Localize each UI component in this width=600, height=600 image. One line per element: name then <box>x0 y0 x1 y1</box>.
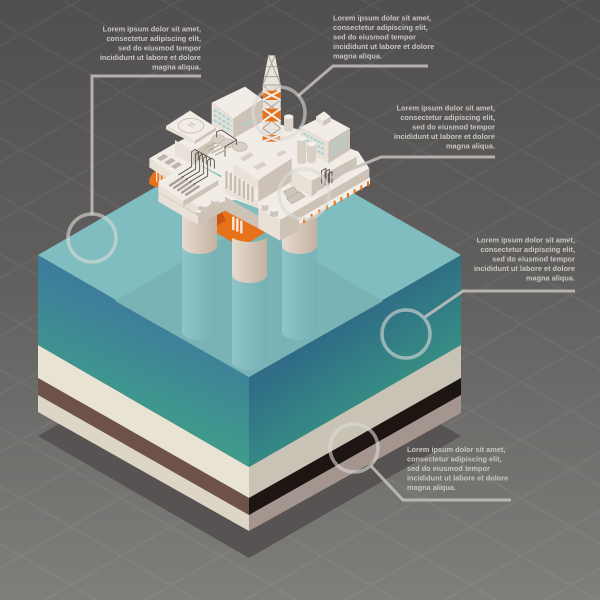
callout 3: deck <box>279 104 495 219</box>
water surface <box>38 133 461 377</box>
callout text 4: sed do eiusmod tempor <box>492 254 575 264</box>
callout text 3: consectetur adipiscing elit, <box>400 113 495 122</box>
submerged legs <box>182 225 317 370</box>
drilling derrick <box>263 55 281 142</box>
helideck <box>166 111 216 165</box>
central block <box>233 143 292 190</box>
orange understructure centre <box>199 207 266 247</box>
dark rock layer <box>38 378 461 515</box>
sand layer <box>38 345 461 498</box>
main building <box>212 87 263 138</box>
callout text 3: magna aliqua. <box>446 142 495 150</box>
callout text 1: incididunt ut labore et dolore <box>100 53 201 62</box>
callout text 5: incididunt ut labore et dolore <box>407 474 508 482</box>
callout text 2: Lorem ipsum dolor sit amet, <box>333 14 431 22</box>
callout text 4: consectetur adipiscing elit, <box>480 245 575 254</box>
walkway right <box>317 176 345 197</box>
callout text 2: magna aliqua. <box>333 52 382 60</box>
right building windows <box>303 133 325 155</box>
ground shadow <box>38 314 461 558</box>
horizontal tanks right <box>283 187 305 204</box>
callout text 4: magna aliqua. <box>526 274 575 282</box>
derrick orange bands <box>263 91 281 142</box>
callout text 3: incididunt ut labore et dolore <box>394 132 495 141</box>
callout 4: water <box>382 236 575 358</box>
callout text 1: magna aliqua. <box>152 62 201 72</box>
callout text 2: consectetur adipiscing elit, <box>333 23 428 32</box>
pipework left <box>178 149 214 184</box>
seabed block <box>38 345 461 531</box>
pipework centre <box>217 130 237 157</box>
callout text 1: sed do eiusmod tempor <box>118 44 201 52</box>
floor grating <box>205 143 226 155</box>
roof unit <box>316 111 331 126</box>
water left face <box>38 255 249 467</box>
right building <box>300 111 350 163</box>
grey cooling module <box>169 177 199 195</box>
water right face <box>249 255 461 467</box>
small deck tanks <box>196 198 278 217</box>
central and right lower deck <box>217 117 369 241</box>
orange understructure rear <box>149 171 167 187</box>
platform legs above water <box>182 205 317 283</box>
callout text 3: sed do eiusmod tempor <box>412 122 495 132</box>
callout text 5: sed do eiusmod tempor <box>407 464 490 473</box>
callout 1: surface <box>68 24 201 262</box>
callout text 1: Lorem ipsum dolor sit amet, <box>103 24 201 34</box>
callout text 4: incididunt ut labore et dolore <box>474 264 575 273</box>
vent stacks <box>225 171 254 203</box>
water block <box>38 133 461 467</box>
submerged back floor seen through surface <box>115 223 383 377</box>
grey ridged units left <box>157 154 182 169</box>
callout text 2: sed do eiusmod tempor <box>333 32 416 42</box>
central deck faces <box>225 170 292 208</box>
lower left deck <box>158 162 255 225</box>
vertical storage tanks <box>284 114 316 164</box>
main deck silhouette <box>149 113 358 207</box>
callout text 5: consectetur adipiscing elit, <box>407 454 502 464</box>
callout text 5: Lorem ipsum dolor sit amet, <box>407 445 505 454</box>
callout text 5: magna aliqua. <box>407 483 456 492</box>
pipework right <box>322 168 332 187</box>
callout 5: seabed <box>330 424 511 500</box>
callout 2: derrick <box>253 14 434 139</box>
horizontal tanks <box>212 135 247 151</box>
callout text 1: consectetur adipiscing elit, <box>106 34 201 43</box>
raised slab left <box>158 165 218 207</box>
callout text 3: Lorem ipsum dolor sit amet, <box>397 104 495 112</box>
oil platform <box>149 55 370 241</box>
lower layer <box>38 395 461 531</box>
callout text 2: incididunt ut labore et dolore <box>333 42 434 51</box>
callout text 4: Lorem ipsum dolor sit amet, <box>477 236 575 244</box>
right deck railing with orange posts <box>299 177 370 224</box>
right block <box>290 150 357 197</box>
